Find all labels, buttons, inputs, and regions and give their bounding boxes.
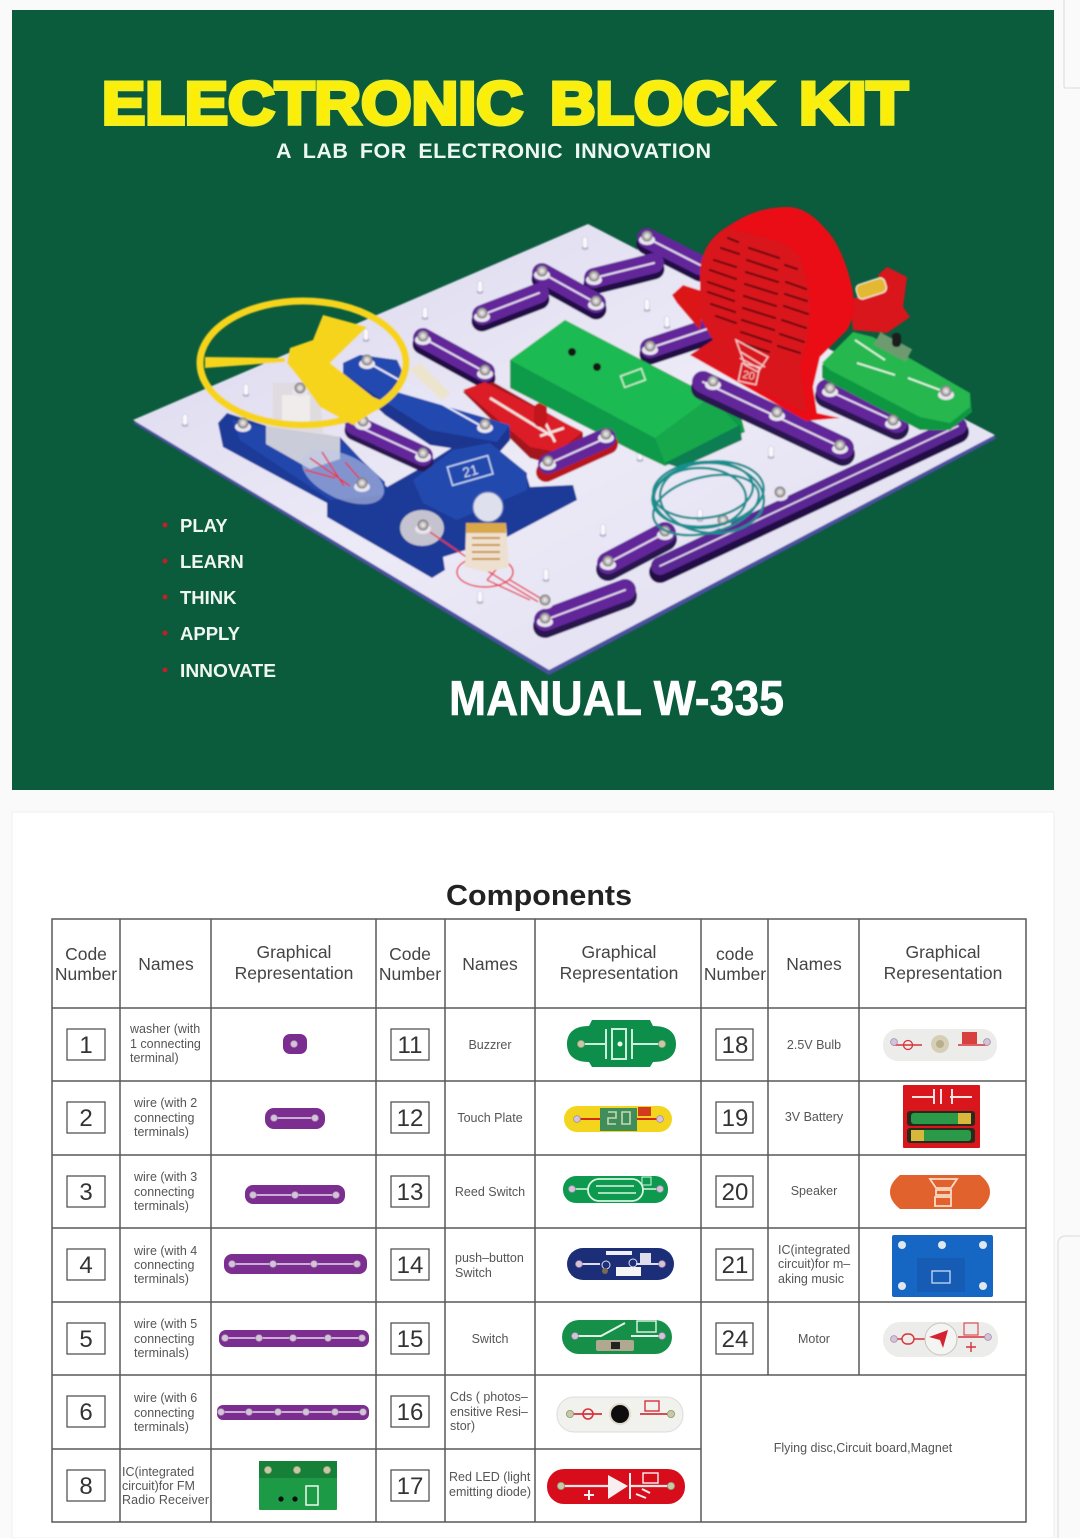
component names: connecting bbox=[134, 1258, 195, 1272]
component names: Reed Switch bbox=[455, 1185, 525, 1199]
component names: Radio Receiver bbox=[122, 1493, 209, 1507]
component names: terminal) bbox=[130, 1051, 179, 1065]
table header: Representation bbox=[884, 963, 1002, 983]
subtitle: A LAB FOR ELECTRONIC INNOVATION bbox=[276, 139, 711, 163]
code number boxes: 13 bbox=[397, 1179, 423, 1206]
code number boxes: 18 bbox=[722, 1032, 748, 1059]
code number boxes: 4 bbox=[79, 1252, 93, 1279]
table header: Number bbox=[55, 964, 117, 984]
table header: Names bbox=[786, 954, 842, 974]
component names: terminals) bbox=[134, 1346, 189, 1360]
component names: connecting bbox=[134, 1185, 195, 1199]
table header: Graphical bbox=[906, 942, 980, 962]
table header: code bbox=[716, 944, 754, 964]
component names: connecting bbox=[134, 1332, 195, 1346]
code number boxes: 16 bbox=[397, 1399, 423, 1426]
teal wire coil bbox=[647, 455, 768, 545]
component names: push–button bbox=[455, 1251, 524, 1265]
code number boxes: 20 bbox=[722, 1179, 748, 1206]
title bbox=[102, 70, 908, 137]
green right switch bbox=[822, 332, 972, 430]
component names: Switch bbox=[472, 1332, 508, 1346]
table header: Code bbox=[389, 944, 431, 964]
table header: Names bbox=[138, 954, 194, 974]
table header: Names bbox=[462, 954, 518, 974]
manual number: MANUAL W-335 bbox=[449, 672, 784, 726]
component names: terminals) bbox=[134, 1199, 189, 1213]
code number boxes: 21 bbox=[722, 1252, 748, 1279]
code number boxes: 3 bbox=[79, 1179, 93, 1206]
title: BLOCK bbox=[550, 70, 774, 137]
table grid bbox=[52, 919, 1026, 1522]
yellow flying disc bbox=[200, 301, 406, 425]
icon: photoresistor 16 bbox=[557, 1397, 683, 1432]
panel: components bbox=[12, 812, 1054, 1538]
component names: circuit)for m– bbox=[778, 1257, 850, 1271]
product photo: snap-circuit board bbox=[133, 207, 997, 675]
icons: component pieces bbox=[217, 1020, 998, 1510]
component names: terminals) bbox=[134, 1420, 189, 1434]
component names: 2.5V Bulb bbox=[787, 1038, 841, 1052]
component names: Touch Plate bbox=[457, 1111, 523, 1125]
code number boxes: 2 bbox=[79, 1105, 93, 1132]
icon: 3V battery 19 bbox=[903, 1085, 980, 1148]
icon: wire 3 bbox=[245, 1185, 345, 1204]
bullet list: INNOVATE bbox=[180, 660, 276, 681]
component names: washer (with bbox=[129, 1022, 200, 1036]
code number boxes: 24 bbox=[722, 1326, 748, 1353]
studs front row bbox=[235, 376, 954, 627]
component names: circuit)for FM bbox=[122, 1479, 195, 1493]
title: ELECTRONIC bbox=[102, 70, 523, 137]
bullet list: LEARN bbox=[180, 551, 244, 572]
title: KIT bbox=[799, 70, 908, 137]
component names: aking music bbox=[778, 1272, 844, 1286]
icon: FM radio IC 8 bbox=[259, 1461, 337, 1510]
icon: wire 4 bbox=[224, 1254, 367, 1274]
icon: wire 5 bbox=[219, 1330, 369, 1347]
glass bulb bbox=[400, 492, 553, 609]
code number boxes: 5 bbox=[79, 1326, 93, 1353]
bullet list: PLAY bbox=[180, 515, 228, 536]
table header: Number bbox=[379, 964, 441, 984]
code number boxes: 17 bbox=[397, 1473, 423, 1500]
component names: Cds ( photos– bbox=[450, 1390, 528, 1404]
bullet list: APPLY bbox=[180, 623, 241, 644]
component names: Red LED (light bbox=[449, 1470, 531, 1484]
studs mid row bbox=[355, 330, 614, 470]
code number boxes: 8 bbox=[79, 1473, 93, 1500]
table header: Code bbox=[65, 944, 107, 964]
bullet list: THINK bbox=[180, 587, 237, 608]
red speaker bbox=[672, 207, 910, 421]
red speaker: 20 bbox=[741, 369, 756, 383]
icon: wire 6 bbox=[217, 1405, 369, 1420]
component names: stor) bbox=[450, 1419, 475, 1433]
IC block number 21 bbox=[413, 443, 527, 520]
blue base with motor and IC bbox=[218, 413, 577, 578]
component names: wire (with 2 bbox=[133, 1096, 197, 1110]
IC block number 21: 21 bbox=[461, 461, 480, 481]
icon: washer 1 bbox=[283, 1034, 307, 1054]
component names: 3V Battery bbox=[785, 1110, 844, 1124]
code number boxes: 14 bbox=[397, 1252, 423, 1279]
icon: music IC 21 bbox=[892, 1235, 993, 1297]
wire pieces back row bbox=[423, 238, 710, 378]
component names: Switch bbox=[455, 1266, 492, 1280]
icon: push-button switch 14 bbox=[567, 1248, 674, 1280]
icon: reed switch 13 bbox=[563, 1176, 668, 1203]
scrollbar marks at right edge bbox=[1058, 0, 1080, 1538]
table header: Representation bbox=[235, 963, 353, 983]
component names: connecting bbox=[134, 1406, 195, 1420]
code number boxes: 1 bbox=[79, 1032, 93, 1059]
lower purple wires bbox=[545, 382, 958, 626]
table header bbox=[55, 942, 1002, 984]
icon: speaker 20 bbox=[890, 1175, 990, 1209]
component names: Flying disc,Circuit board,Magnet bbox=[774, 1441, 953, 1455]
component names: Speaker bbox=[791, 1184, 837, 1198]
component names: IC(integrated bbox=[122, 1465, 194, 1479]
icon: switch 15 bbox=[562, 1320, 672, 1354]
studs back row bbox=[474, 230, 658, 355]
bullet list bbox=[162, 515, 276, 681]
components heading: Components bbox=[446, 880, 632, 912]
code number boxes: 11 bbox=[398, 1032, 422, 1059]
green IC block bbox=[510, 320, 745, 468]
icon: red LED 17 bbox=[547, 1469, 685, 1504]
component names: wire (with 4 bbox=[133, 1244, 197, 1258]
table header: Number bbox=[704, 964, 766, 984]
component names: ensitive Resi– bbox=[450, 1405, 528, 1419]
icon: motor 24 bbox=[883, 1322, 998, 1357]
board plate bbox=[133, 224, 997, 675]
white flap bbox=[410, 363, 450, 400]
wire over LED bbox=[546, 438, 608, 472]
component names: IC(integrated bbox=[778, 1243, 850, 1257]
code number boxes: 15 bbox=[397, 1326, 423, 1353]
board pegs bbox=[182, 237, 774, 604]
component names: wire (with 3 bbox=[133, 1170, 197, 1184]
icon: touch plate 12 bbox=[564, 1106, 672, 1132]
component names: 1 connecting bbox=[130, 1037, 201, 1051]
component names bbox=[122, 1022, 953, 1507]
panel: cover bbox=[12, 10, 1054, 790]
glass motor bbox=[266, 382, 392, 516]
table header: Graphical bbox=[582, 942, 656, 962]
component names: Buzzrer bbox=[468, 1038, 512, 1052]
code number boxes: 12 bbox=[397, 1105, 423, 1132]
purple wire under switch bbox=[355, 425, 423, 461]
icon: buzzer 11 bbox=[567, 1020, 676, 1067]
code number boxes bbox=[67, 1029, 753, 1501]
component names: emitting diode) bbox=[449, 1485, 531, 1499]
icon: 2.5V bulb 18 bbox=[883, 1029, 997, 1061]
component names: Motor bbox=[798, 1332, 830, 1346]
code number boxes: 19 bbox=[722, 1105, 748, 1132]
component names: wire (with 6 bbox=[133, 1391, 197, 1405]
component names: connecting bbox=[134, 1111, 195, 1125]
icon: wire 2 bbox=[265, 1108, 325, 1129]
component names: wire (with 5 bbox=[133, 1317, 197, 1331]
red LED plate bbox=[463, 382, 583, 466]
code number boxes: 6 bbox=[79, 1399, 93, 1426]
table header: Representation bbox=[560, 963, 678, 983]
table header: Graphical bbox=[257, 942, 331, 962]
component names: terminals) bbox=[134, 1125, 189, 1139]
blue push switch bbox=[343, 355, 510, 455]
component names: terminals) bbox=[134, 1272, 189, 1286]
